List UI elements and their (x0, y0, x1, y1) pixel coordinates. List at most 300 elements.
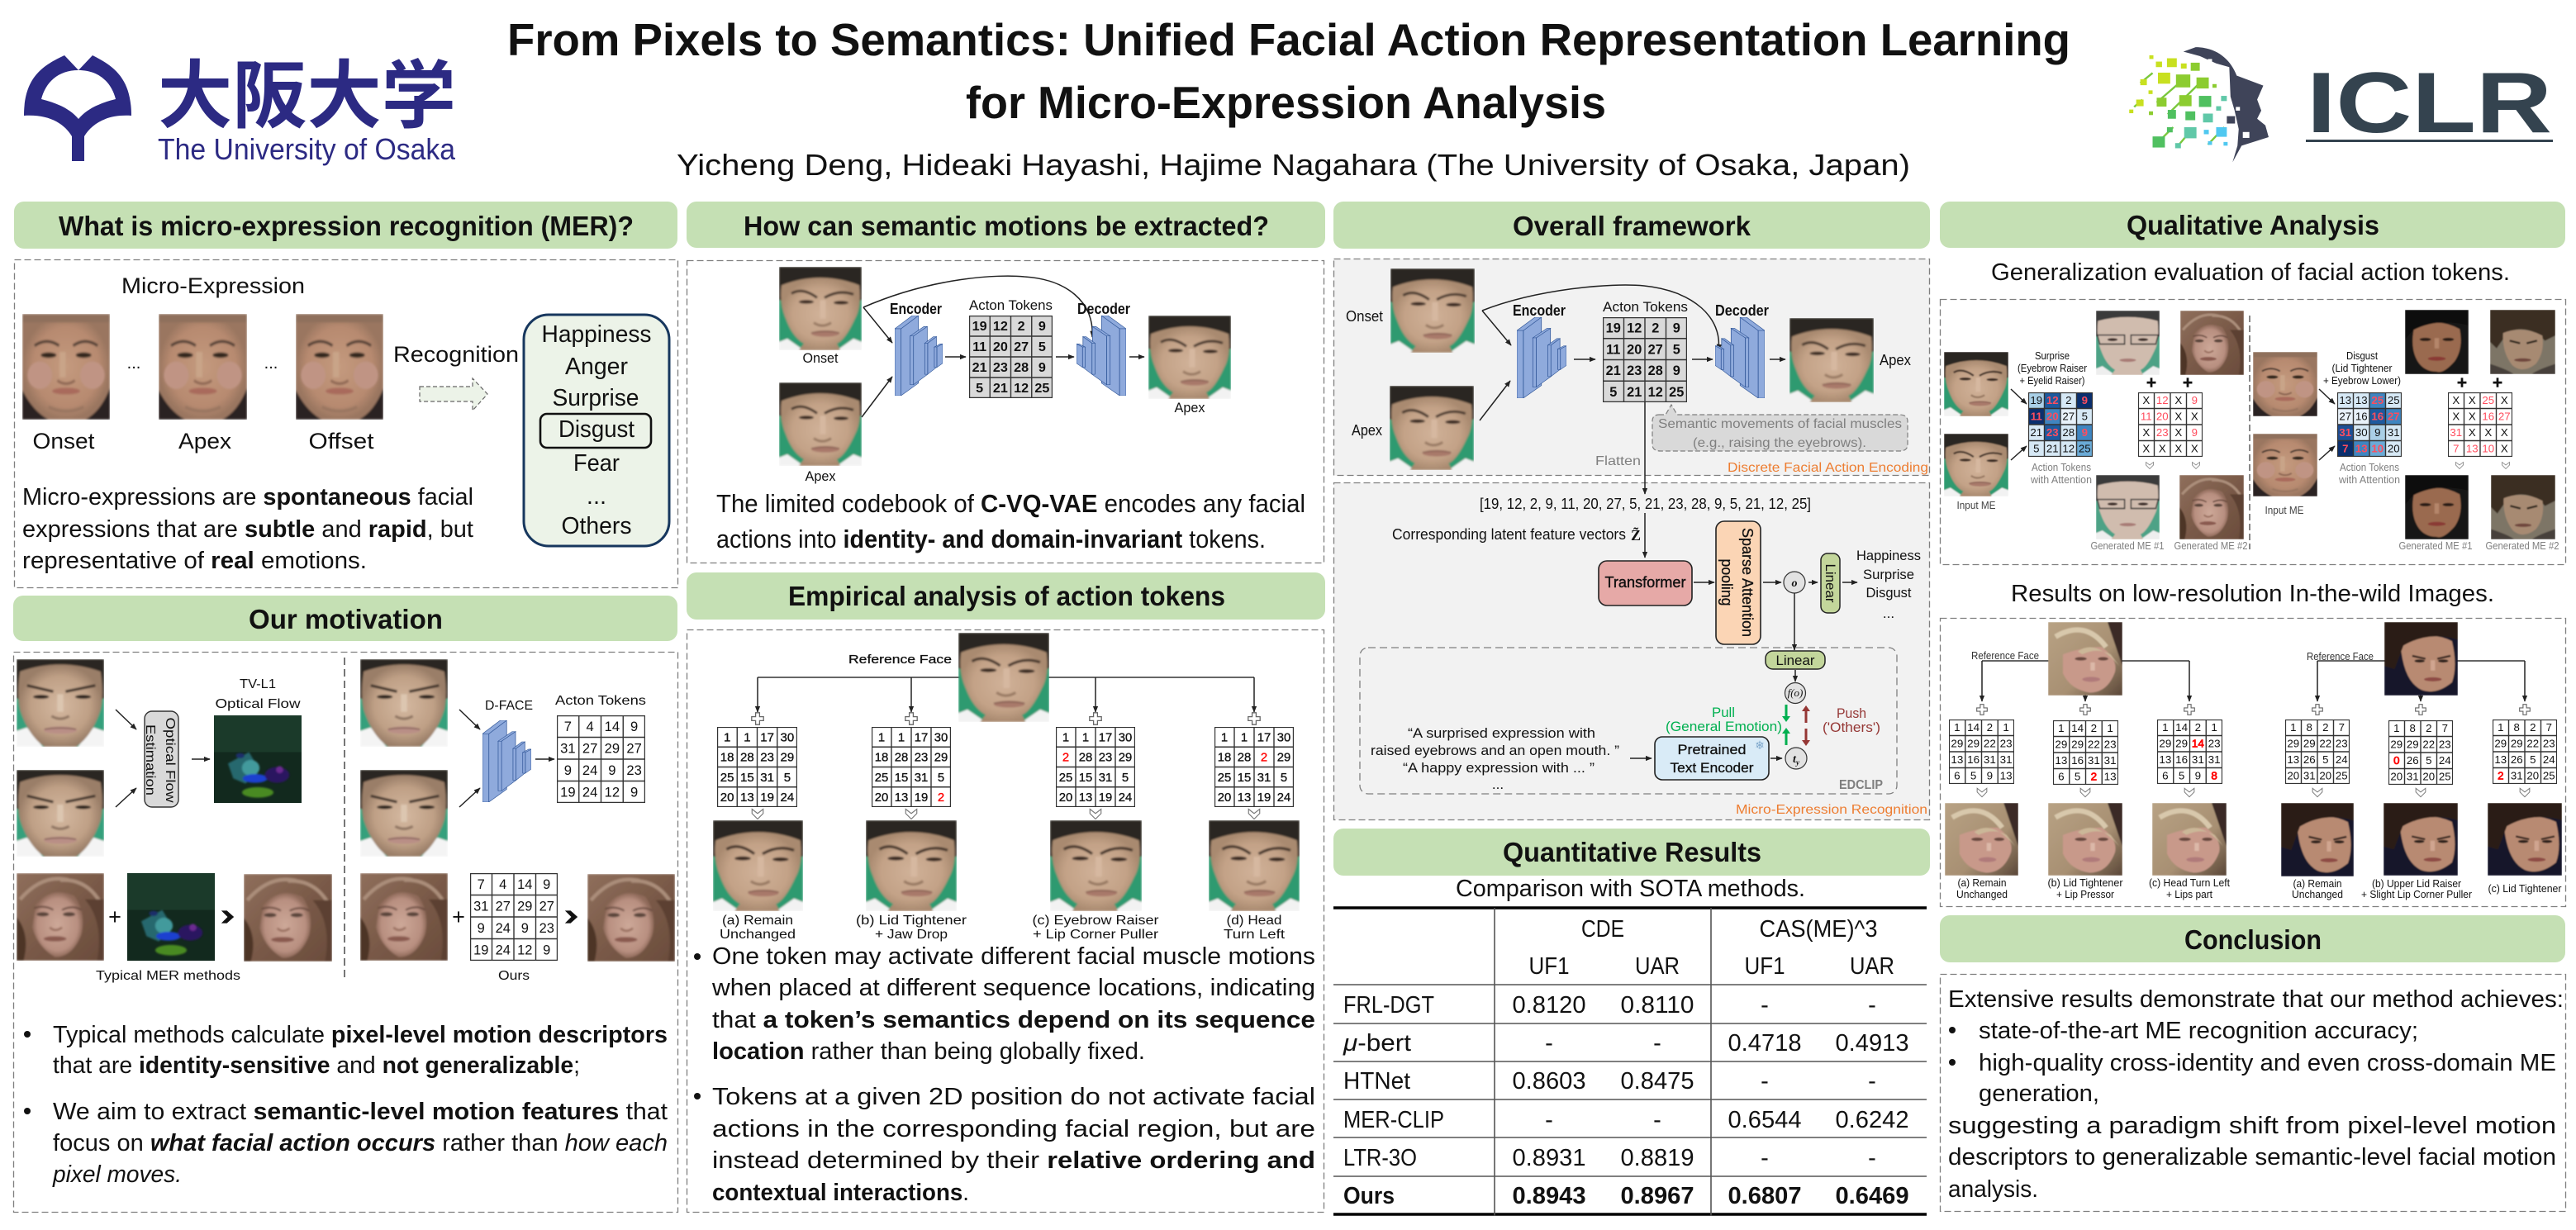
equation: ours: 24 (496, 943, 511, 958)
masked token grid left: X (2174, 443, 2182, 455)
grid left a: 23 (2000, 738, 2013, 750)
arrow: o to linear (1794, 593, 1795, 650)
ellipsis marks: ... (127, 354, 140, 373)
attention token grid right: 30 (2355, 426, 2368, 439)
equation: ours: 29 (517, 900, 532, 914)
class labels: Happiness (1856, 548, 1921, 563)
grid c: 5 (1122, 771, 1129, 785)
table: quantitative results: - (1868, 992, 1876, 1019)
token grid: 9 (1673, 363, 1680, 378)
label: pull: Pull (1712, 705, 1735, 720)
table: quantitative results: LTR-3O (1343, 1145, 1417, 1171)
box: pretrained text encoder: Text Encoder (1671, 760, 1754, 776)
masked token grid right: X (2452, 394, 2460, 406)
arrows into encoder and skip connection (862, 276, 1092, 417)
text: motivation bullets: Typical methods calculate pixel-level motion descriptors (53, 1022, 668, 1048)
grid right c: 29 (2511, 738, 2523, 750)
masked token grid left: 20 (2156, 411, 2169, 423)
grid left c: 5 (2179, 770, 2184, 782)
label: surprise: (Eyebrow Raiser (2018, 362, 2088, 374)
token grid: 14 (605, 719, 620, 734)
label: decoder: Decoder (1077, 301, 1130, 317)
grid a: 19 (760, 791, 774, 805)
grid c (1056, 727, 1135, 807)
token grid: 9 (630, 719, 638, 734)
equation: typical methods: Typical MER methods (96, 969, 240, 983)
icons: chevrons right (2312, 788, 2530, 797)
grid left b: 6 (2058, 771, 2065, 783)
grid left b: 23 (2104, 738, 2117, 751)
grid right b: 2 (2426, 722, 2431, 734)
table: quantitative results: UF1 (1745, 953, 1785, 980)
grid right b: 0 (2393, 754, 2399, 767)
grid right b: 5 (2426, 754, 2431, 767)
arrow (1694, 582, 1714, 583)
heading: how can semantic motions be extracted (687, 202, 1325, 248)
title: for Micro-Expression Analysis (966, 77, 1606, 128)
grid left c: 23 (2208, 738, 2221, 750)
masked token grid right: X (2452, 411, 2460, 423)
frame labels: Onset (33, 429, 95, 454)
grid left a: 5 (1970, 770, 1976, 782)
masked token grid left: X (2191, 411, 2198, 423)
grid right b: 25 (2439, 771, 2451, 783)
attention token grid left: 27 (2062, 411, 2075, 423)
equation: ours: 14 (517, 877, 532, 892)
grid right b: 29 (2390, 738, 2403, 751)
token grid: 2 (1652, 321, 1659, 336)
text: prompts: “A surprised expression with (1408, 725, 1595, 741)
equation: typical methods (17, 873, 332, 983)
grid b: 29 (934, 751, 948, 765)
grid left a: 9 (1987, 770, 1993, 782)
class labels: Surprise (1863, 567, 1914, 582)
token grid: 25 (1034, 381, 1049, 396)
panel: semantic motion extraction (687, 261, 1324, 563)
text: motivation bullets (24, 1022, 668, 1188)
grid right c: 13 (2494, 753, 2507, 766)
text: conclusion: state-of-the-art ME recognition accuracy; (1979, 1018, 2418, 1044)
attention token grid left: 21 (2046, 443, 2059, 455)
divider (344, 658, 345, 981)
grid right b: 7 (2442, 722, 2448, 734)
logo: ICLR (2129, 47, 2553, 162)
node: t_y: t (1793, 753, 1796, 766)
token grid: 21 (1606, 363, 1621, 378)
callout: semantic movements (1652, 405, 1908, 451)
image: optical flow map (214, 715, 302, 803)
grid d: 19 (1257, 791, 1271, 805)
token grid: 7 (564, 719, 572, 734)
masked token grid left: 12 (2156, 394, 2169, 406)
equation: ours: 19 (473, 943, 488, 958)
captions right (2292, 877, 2562, 900)
grid d: 17 (1257, 730, 1271, 744)
text: prompts (1371, 725, 1619, 792)
grid a: 1 (744, 730, 751, 744)
captions: (c) Eyebrow Raiser (1033, 914, 1159, 928)
grid left a: 16 (1967, 753, 1980, 766)
label: action tokens with attention: Action Tokens (2340, 461, 2399, 473)
grid left c: 31 (2208, 753, 2221, 766)
emotion classes box: Fear (573, 450, 620, 477)
masked token grid left: X (2191, 443, 2198, 455)
icons: plus: ✚ (2456, 377, 2468, 389)
masked token grid right: 27 (2498, 411, 2511, 423)
masked token grid right: X (2469, 394, 2476, 406)
emotion classes box: Others (562, 513, 631, 539)
icons: arrows down (2455, 463, 2510, 469)
grid b: 25 (875, 771, 888, 785)
grid c: 30 (1119, 730, 1132, 744)
table: quantitative results: 0.6544 (1728, 1107, 1801, 1133)
token grid: 9 (608, 763, 615, 778)
grid left b: 1 (2058, 722, 2065, 734)
table: quantitative results: 0.8931 (1512, 1145, 1586, 1171)
token grid: 24 (582, 786, 597, 800)
label: disgust (2323, 349, 2401, 387)
heading: overall framework: Overall framework (1513, 211, 1751, 241)
grid right b: 31 (2407, 771, 2419, 783)
token grid: 19 (560, 786, 576, 800)
attention token grid left: 12 (2062, 443, 2075, 455)
grid left b: 14 (2071, 722, 2084, 734)
grid right a: 2 (2322, 721, 2328, 734)
masked token grid right: 16 (2482, 411, 2494, 423)
node: o (1784, 572, 1805, 593)
captions: + Lip Corner Puller (1033, 928, 1159, 942)
ellipsis marks: ... (264, 354, 278, 373)
text: empirical bullets: One token may activate different facial muscle motions (712, 943, 1315, 970)
label: input ME: Input ME (2265, 504, 2304, 516)
grid b: 20 (875, 791, 888, 805)
label: apex: Apex (1175, 400, 1205, 416)
table: quantitative results: CAS(ME)^3 (1760, 916, 1877, 943)
token grid: 28 (1648, 363, 1663, 378)
label: surprise: Surprise (2035, 349, 2070, 362)
attention token grid right: 27 (2388, 411, 2400, 423)
attention token grid right: 7 (2342, 443, 2348, 455)
arrow (192, 758, 210, 760)
text: prompts: ... (1492, 776, 1504, 792)
grid a: 28 (740, 751, 754, 765)
box: linear (1821, 553, 1840, 613)
grid left b: 22 (2088, 738, 2100, 751)
attention token grid right: 25 (2371, 394, 2384, 406)
grid right c: 22 (2526, 738, 2539, 750)
grid right a: 5 (2322, 753, 2328, 766)
text: prompts: “A happy expression with ... ” (1403, 760, 1595, 776)
label: action tokens with attention: Action Tokens (2032, 461, 2091, 473)
attention token grid left: 21 (2030, 426, 2042, 439)
grid c: 2 (1062, 751, 1069, 765)
attention token grid right: 16 (2371, 411, 2384, 423)
logo: The University of Osaka: 大阪大学 (158, 55, 456, 138)
heading: quantitative results: Quantitative Results (1503, 837, 1761, 867)
label: action tokens with attention: with Attention (2030, 473, 2092, 486)
label: micro-expression recognition: Micro-Expression Recognition (1736, 803, 1927, 817)
panel: discrete facial action encoding (1333, 259, 1930, 476)
icon: encoder (1517, 317, 1566, 398)
captions left (1956, 876, 2230, 900)
grid right c: 29 (2494, 738, 2507, 750)
class labels: ... (1883, 606, 1894, 621)
text: empirical bullets: when placed at different sequence locations, indicating (711, 975, 1315, 1001)
grid right c: 7 (2546, 721, 2552, 734)
grid right c: 1 (2498, 721, 2503, 734)
token grid: 21 (1627, 385, 1642, 400)
attention token grid left: 19 (2030, 394, 2042, 406)
equation: ours: 4 (499, 877, 506, 892)
attention token grid left: 5 (2033, 443, 2039, 455)
label: encoder: Encoder (1513, 302, 1566, 319)
grid right a: 31 (2303, 770, 2316, 782)
grid b: 2 (938, 791, 944, 805)
grid left a: 13 (1951, 753, 1963, 766)
grid b: 1 (878, 730, 885, 744)
grid b: 13 (895, 791, 908, 805)
labels: generated ME (2399, 539, 2559, 552)
heading: how can semantic motions be extracted: How can semantic motions be extracted? (744, 211, 1269, 241)
image: generated male faces (2281, 803, 2562, 876)
image: reference face male (2384, 622, 2458, 696)
attention token grid left: 9 (2082, 394, 2088, 406)
masked token grid left: X (2174, 411, 2182, 423)
masked token grid left: X (2142, 426, 2150, 439)
label: input ME: Input ME (1956, 499, 1996, 511)
grid right b: 29 (2407, 738, 2419, 751)
label: disgust: Disgust (2346, 349, 2378, 362)
grid left b: 1 (2107, 722, 2113, 734)
grid right b (2388, 720, 2453, 785)
captions right: (a) Remain (2293, 877, 2341, 890)
token grid: 31 (560, 742, 576, 757)
token grid: 21 (972, 360, 987, 375)
node: f(o): f(o) (1788, 686, 1803, 699)
image: motivation input faces right (360, 659, 448, 857)
grid c: 28 (1079, 751, 1092, 765)
box: linear 2: Linear (1776, 653, 1815, 668)
grid d (1214, 727, 1294, 807)
token grid: 27 (1648, 342, 1663, 357)
image: input faces left (1944, 352, 2008, 496)
icons: plus (2146, 377, 2193, 389)
masked token grid right: X (2501, 443, 2508, 455)
token grid (969, 316, 1053, 398)
grid d: 28 (1238, 751, 1251, 765)
panel: conclusion (1940, 975, 2566, 1211)
grid left b: 29 (2071, 738, 2084, 751)
table: quantitative results: - (1653, 1030, 1661, 1057)
token grid: 27 (626, 742, 642, 757)
labels: generated ME: Generated ME #2 (2485, 539, 2559, 552)
token grid (557, 715, 645, 803)
image: onset face (22, 314, 110, 420)
token grid: 19 (972, 319, 987, 334)
attention token grid right: 13 (2339, 394, 2351, 406)
table: quantitative results: - (1545, 1030, 1553, 1057)
equation: ours: Ours (498, 969, 530, 983)
frame labels: Apex (178, 429, 232, 454)
text: empirical bullets: instead determined by their relative ordering and (712, 1147, 1315, 1174)
text: motivation bullets: pixel moves. (52, 1161, 182, 1188)
panel: generalization evaluation (1940, 299, 2566, 565)
image: reference face blonde (2048, 622, 2122, 696)
grid left c: 29 (2175, 738, 2188, 750)
text: prompts: raised eyebrows and an open mouth. ” (1371, 743, 1619, 758)
box: optical flow estimation: Optical Flow (163, 717, 177, 803)
arrows (2011, 389, 2027, 460)
text: definition: Micro-expressions are spontaneous facial (22, 484, 473, 511)
attention token grid right: 13 (2355, 394, 2368, 406)
caption: comparison: Comparison with SOTA methods. (1456, 876, 1805, 902)
grid a: 20 (720, 791, 734, 805)
grid d: 24 (1277, 791, 1290, 805)
grid d: 18 (1218, 751, 1231, 765)
connectors left (1982, 661, 2189, 701)
captions: (b) Lid Tightener (856, 914, 967, 928)
text: conclusion: analysis. (1948, 1176, 2038, 1203)
table: quantitative results: 0.8943 (1512, 1183, 1586, 1209)
label: latent feature vectors: Corresponding latent feature vectors (1392, 526, 1626, 543)
token grid: 23 (626, 763, 642, 778)
text: conclusion: generation, (1979, 1080, 2099, 1107)
grid b: 18 (875, 751, 888, 765)
grid left a: 6 (1954, 770, 1961, 782)
grid right b: 20 (2390, 771, 2403, 783)
masked token grid left (2138, 392, 2203, 457)
arrows (1630, 757, 1782, 759)
grid b: 30 (934, 730, 948, 744)
attention token grid right: 20 (2388, 443, 2400, 455)
heading: What is micro-expression recognition: What is micro-expression recognition (MER)? (59, 211, 634, 241)
emotion classes box: Disgust (558, 416, 634, 443)
icons: plus: ✚ (2182, 377, 2193, 389)
image: apex face (779, 382, 862, 466)
label: encoder: Encoder (890, 301, 942, 317)
grid right a: 7 (2339, 721, 2345, 734)
label: action tokens with attention: with Attention (2338, 473, 2400, 486)
icon: decoder (1715, 317, 1765, 398)
arrows into encoder and skip connection (1480, 285, 1718, 420)
text: conclusion: Extensive results demonstrate that our method achieves: (1948, 986, 2564, 1013)
text: definition: representative of real emotions. (22, 548, 367, 574)
grid right c: 5 (2530, 753, 2536, 766)
text: codebook: The limited codebook of C-VQ-VAE encodes any facial (716, 489, 1305, 518)
equation: ours (360, 873, 675, 983)
table: quantitative results: 0.8120 (1512, 992, 1586, 1019)
text: codebook: actions into identity- and domain-invariant tokens. (716, 525, 1266, 553)
token grid: 11 (972, 340, 986, 354)
grid left a: 1 (1954, 721, 1961, 734)
captions left: (c) Head Turn Left (2149, 876, 2230, 889)
equation: ours: 9 (543, 877, 550, 892)
arrows (945, 356, 1144, 358)
title: From Pixels to Semantics: Unified Facial Action Representation Learning (507, 14, 2070, 65)
grid right c: 2 (2530, 721, 2536, 734)
masked token grid left: X (2159, 443, 2166, 455)
icon: encoder (895, 316, 943, 396)
grid d: 5 (1281, 771, 1287, 785)
attention token grid right: 9 (2374, 426, 2380, 439)
arrows into optical flow (116, 710, 136, 807)
box: pretrained text encoder (1655, 737, 1769, 780)
label: TV-L1 optical flow (215, 677, 301, 711)
image: onset face (1390, 268, 1475, 353)
masked token grid right: X (2501, 394, 2508, 406)
token grid: 5 (1673, 342, 1680, 357)
label: TV-L1 optical flow: Optical Flow (215, 697, 301, 711)
label: push (1823, 705, 1880, 735)
callout: semantic movements: (e.g., raising the eyebrows). (1693, 436, 1866, 450)
grid c: 31 (1099, 771, 1112, 785)
table: quantitative results: 0.8967 (1621, 1183, 1694, 1209)
table: quantitative results: μ-bert (1343, 1030, 1411, 1057)
grid right c: 31 (2511, 770, 2523, 782)
table: quantitative results: HTNet (1343, 1068, 1410, 1095)
node: f(o) (1785, 682, 1806, 704)
grid b: 17 (915, 730, 928, 744)
image: generated faces left (2096, 475, 2244, 539)
table: quantitative results: Ours (1343, 1183, 1395, 1209)
grid c: 15 (1079, 771, 1092, 785)
label: action tokens: Acton Tokens (555, 694, 646, 708)
emotion classes box: Anger (565, 354, 628, 380)
arrows (1763, 582, 1818, 583)
grid c: 13 (1079, 791, 1092, 805)
panel: what is MER (15, 259, 677, 588)
masked token grid right: X (2484, 426, 2492, 439)
attention token grid left: 5 (2082, 411, 2088, 423)
grid d: 25 (1218, 771, 1231, 785)
box: EDCLIP: EDCLIP (1839, 778, 1883, 792)
grid b: 5 (938, 771, 944, 785)
table: quantitative results: FRL-DGT (1343, 992, 1434, 1019)
arrow (1842, 582, 1857, 583)
box: sparse attention pooling: Sparse Attention (1739, 528, 1756, 637)
captions: + Jaw Drop (875, 928, 948, 942)
table: quantitative results: UAR (1635, 953, 1680, 980)
grid left a (1949, 719, 2014, 784)
grid left a: 22 (1984, 738, 1996, 750)
labels: generated ME: Generated ME #2 (2174, 539, 2247, 552)
grid right b: 8 (2410, 722, 2416, 734)
image: apex face (1390, 386, 1474, 470)
arrow (1644, 513, 1646, 558)
grid right c: 8 (2514, 721, 2520, 734)
captions: Turn Left (1224, 928, 1286, 942)
masked token grid left: X (2142, 394, 2150, 406)
token grid: 24 (582, 763, 597, 778)
frame labels (33, 429, 374, 454)
image: generated blonde faces (1945, 803, 2227, 876)
box: pretrained text encoder: Pretrained (1677, 742, 1747, 757)
attention token grid right: 27 (2339, 411, 2351, 423)
grid left c (2157, 719, 2222, 784)
text: conclusion: suggesting a paradigm shift from pixel-level motion (1948, 1113, 2556, 1139)
grid left a: 31 (1984, 753, 1996, 766)
arrow: flatten (1644, 402, 1646, 494)
token grid: 9 (564, 763, 572, 778)
token grid: 20 (1627, 342, 1642, 357)
equation: ours: 9 (521, 921, 529, 936)
grid b: 28 (895, 751, 908, 765)
table: quantitative results: UAR (1850, 953, 1894, 980)
equation: typical methods: + (108, 905, 121, 929)
table: quantitative results: - (1761, 1145, 1769, 1171)
label: reference face: Reference Face (2307, 650, 2374, 662)
table: quantitative results: 0.8110 (1621, 992, 1694, 1019)
